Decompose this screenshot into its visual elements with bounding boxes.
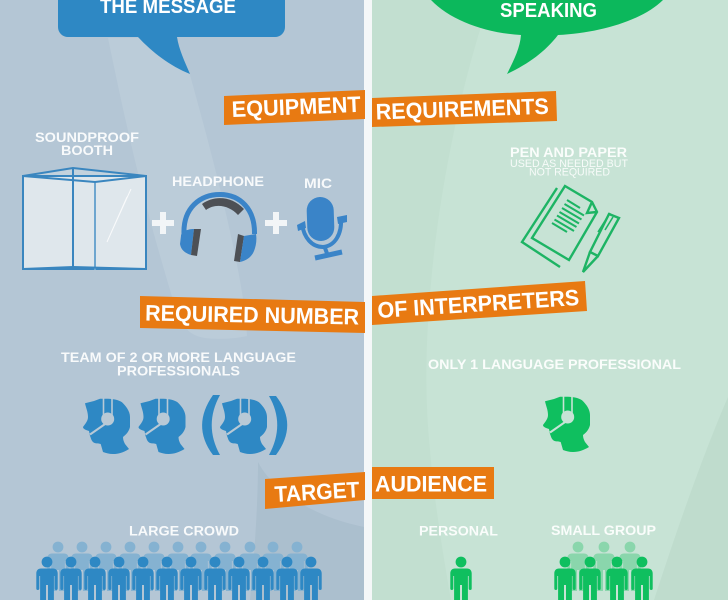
icon: mic	[297, 197, 347, 258]
label: mic: MIC	[304, 176, 332, 191]
heading: required number: REQUIRED NUMBER	[145, 301, 359, 330]
speech bubble: speaking: SPEAKING	[500, 0, 597, 22]
heading: requirements: REQUIREMENTS	[375, 94, 549, 124]
label: soundproof booth: SOUNDPROOF	[35, 130, 139, 145]
icon: soundproof booth	[23, 168, 146, 270]
heading: audience: AUDIENCE	[375, 472, 487, 496]
panel: consecutive interpreting background	[372, 0, 728, 600]
divider	[364, 0, 372, 600]
label: team of 2 or more	[61, 350, 296, 378]
speech bubble: the message	[58, 0, 285, 74]
label: pen and paper: NOT REQUIRED	[529, 166, 610, 178]
icon: large crowd	[36, 542, 322, 600]
icon: pen and paper	[522, 186, 619, 272]
heading: of interpreters: OF INTERPRETERS	[377, 285, 580, 323]
icon: single person	[450, 557, 472, 600]
label: soundproof booth	[35, 130, 139, 158]
label: team of 2 or more: TEAM OF 2 OR MORE LANGUAGE	[61, 350, 296, 365]
icon: headphone	[180, 194, 256, 262]
label: pen and paper	[510, 145, 628, 178]
label: soundproof booth: BOOTH	[61, 143, 113, 158]
label: small group: SMALL GROUP	[551, 523, 656, 538]
label: pen and paper: USED AS NEEDED BUT	[510, 158, 628, 170]
label: team of 2 or more: PROFESSIONALS	[117, 364, 240, 378]
label: personal: PERSONAL	[419, 524, 498, 538]
label: only 1 language professional: ONLY 1 LANGUAGE PROFESSIONAL	[428, 357, 681, 372]
icon: plus	[152, 212, 174, 234]
icon: plus	[265, 212, 287, 234]
icon: optional interpreter in parentheses	[202, 395, 287, 455]
icon: small group	[554, 542, 653, 600]
label: large crowd: LARGE CROWD	[129, 524, 239, 538]
panel: simultaneous interpreting background	[0, 0, 364, 600]
heading: target: TARGET	[274, 477, 360, 507]
speech bubble: speaking	[431, 0, 663, 74]
icon: interpreter 2	[138, 398, 186, 454]
label: pen and paper: PEN AND PAPER	[510, 145, 627, 160]
icon: single interpreter	[543, 396, 590, 452]
icon: interpreter 1	[83, 398, 130, 454]
label: headphone: HEADPHONE	[172, 174, 264, 189]
heading: equipment: EQUIPMENT	[231, 92, 361, 122]
